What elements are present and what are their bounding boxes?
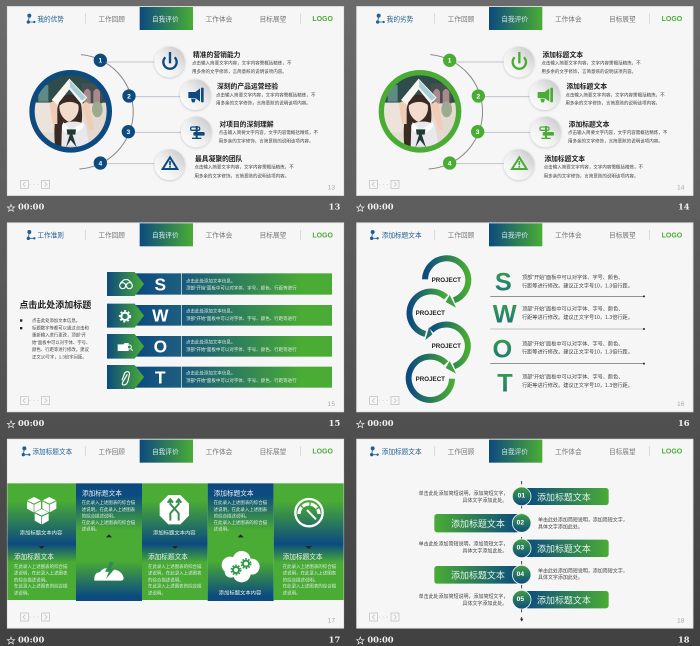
item 2: 点击输入简要文字内容，文字内容需概括精炼，不	[216, 91, 316, 98]
column 4: 添加标题文本内容	[219, 589, 262, 597]
ring 2: PROJECT	[416, 310, 445, 317]
nav arrows, page number and footer: 00:00	[367, 202, 394, 212]
item 3: 3	[126, 129, 130, 136]
banner T: 点击此处添加文本信息。	[186, 370, 235, 377]
item 4: 最具凝聚的团队	[195, 154, 243, 163]
column 1: 在此录入上述图表的综合描	[14, 583, 68, 590]
SWOT letter W: 行距等进行修改。建议正文字号10，1.3倍行距。	[522, 313, 633, 321]
header bar 18	[370, 440, 683, 463]
SWOT letter O: 行距等进行修改。建议正文字号10，1.3倍行距。	[522, 348, 633, 356]
banner W	[107, 304, 332, 328]
slide 15: SWOT banners	[7, 223, 344, 428]
nav arrows, page number and footer: 13	[328, 185, 335, 192]
column 4: 在此录入上述图表的综合描	[214, 519, 268, 526]
item 4	[94, 149, 294, 180]
nav arrows, page number and footer: 16	[677, 401, 685, 408]
SWOT letter T: T	[497, 370, 513, 398]
column 4: 述说明。	[214, 526, 231, 533]
header bar 13: 自我评价	[152, 14, 179, 23]
header bar 13: 目标展望	[260, 14, 287, 23]
item 2: 2	[127, 93, 131, 100]
column 5: 述说明，在此录入上述图表	[283, 569, 337, 576]
column 3: 在此录入上述图表的综合描	[148, 583, 202, 590]
SWOT letter O: 顶部“开始”面板中可以对字体、字号、颜色、	[522, 339, 623, 347]
header bar 14: 目标展望	[609, 14, 636, 23]
SWOT letter S: 顶部“开始”面板中可以对字体、字号、颜色、	[522, 273, 623, 281]
banner S: S	[155, 275, 166, 295]
nav arrows, page number and footer	[7, 180, 340, 212]
header bar 18: 工作回顾	[448, 447, 475, 456]
nav arrows, page number and footer	[7, 397, 340, 428]
step 01: 单击此处添加简短说明，添加简短文字，	[419, 490, 508, 497]
item 2: 用多余的文字修饰，言简意赅的说明该项内容。	[216, 100, 311, 107]
ring 3	[431, 324, 468, 374]
item 2	[122, 79, 316, 110]
header bar 17: 添加标题文本	[32, 447, 73, 456]
left heading and bullets: 点击此处添加标题	[19, 299, 91, 310]
header bar 15: 工作准则	[37, 231, 64, 240]
step 02: 单击此处添加简短说明，添加简短文字，	[538, 516, 628, 523]
nav arrows, page number and footer: 15	[328, 401, 335, 408]
header bar 13: 工作回顾	[98, 14, 125, 23]
item 1: 点击输入简要文字内容，文字内容需概括精炼，不	[192, 60, 292, 67]
step 03: 03	[517, 545, 524, 552]
header bar 15: 目标展望	[260, 231, 287, 240]
header bar 16: LOGO	[662, 232, 683, 239]
header bar 15: LOGO	[312, 232, 333, 239]
header bar 17: 自我评价	[152, 447, 179, 456]
step 01	[419, 487, 609, 506]
header bar 16: 自我评价	[501, 231, 528, 240]
column 2: 的综合描述说明。	[82, 513, 117, 520]
item 4: 4	[448, 160, 452, 167]
ring 4: PROJECT	[416, 376, 445, 383]
column 5: 述说明。	[283, 589, 300, 596]
header bar 14: 工作体会	[555, 14, 582, 23]
column 1: 述说明。	[14, 589, 32, 596]
column 4	[208, 483, 274, 601]
item 4: 用多余的文字修饰，言简意赅的说明该项内容。	[544, 172, 639, 179]
header bar 16: 添加标题文本	[382, 231, 422, 240]
step 03: 单击此处添加简短说明，添加简短文字，	[419, 541, 508, 548]
item 4	[443, 149, 643, 180]
header bar 14: 自我评价	[501, 14, 528, 23]
item 2	[472, 79, 665, 110]
nav arrows, page number and footer	[357, 180, 690, 212]
header bar 18: LOGO	[662, 449, 683, 456]
item 2: 点击输入简要文字内容，文字内容需概括精炼，不	[565, 91, 665, 98]
left heading and bullets: 点击此处添加文本信息。	[32, 317, 80, 324]
header bar 16: 工作回顾	[448, 231, 475, 240]
SWOT letter T: 顶部“开始”面板中可以对字体、字号、颜色、	[522, 372, 623, 380]
header bar 17	[22, 440, 333, 463]
item 1: 精准的营销能力	[193, 50, 241, 59]
left heading and bullets	[19, 299, 91, 360]
column 1: 添加标题文本	[14, 552, 54, 561]
column 3: 在此录入上述图表的综合描	[148, 563, 202, 570]
item 1: 1	[448, 58, 452, 65]
item 3: 点击输入简要文字内容，文字内容需概括精炼，不	[568, 129, 668, 136]
column 1: 的综合描述说明。	[14, 576, 50, 583]
item 1	[443, 47, 641, 77]
nav arrows, page number and footer: 00:00	[367, 634, 394, 644]
column 3: 述说明。	[148, 589, 166, 596]
header bar 17: LOGO	[312, 449, 333, 456]
ring 4	[409, 357, 452, 400]
step 01: 添加标题文本	[537, 491, 591, 502]
header bar 15	[27, 223, 333, 246]
step 04: 04	[517, 571, 524, 578]
step 03: 添加标题文本	[537, 543, 591, 554]
nav arrows, page number and footer: 14	[677, 185, 685, 192]
nav arrows, page number and footer: 15	[329, 418, 340, 428]
banner T: T	[155, 368, 166, 388]
banner T: 顶部“开始”面板中可以对字体、字号、颜色、行距等进行	[186, 377, 297, 384]
column 3: 述说明，在此录入上述图表	[148, 569, 202, 576]
item 2: 2	[476, 93, 480, 100]
header bar 14: LOGO	[662, 16, 683, 23]
left heading and bullets: 正文10号字，1.3倍字间距。	[32, 353, 87, 360]
header bar 18: 工作体会	[555, 447, 582, 456]
header bar 18: 添加标题文本	[382, 447, 422, 456]
slide 17: five gradient columns	[7, 439, 344, 644]
column 2	[76, 483, 142, 601]
item 3	[122, 117, 318, 147]
column 3: 的综合描述说明。	[148, 576, 184, 583]
header bar 13: 工作体会	[206, 14, 233, 23]
column 2: 述说明。	[82, 526, 99, 533]
portrait photo in blue ring	[32, 73, 109, 150]
column 1: 述说明，在此录入上述图表	[14, 569, 68, 576]
header bar 18: 自我评价	[501, 447, 528, 456]
banner O: 顶部“开始”面板中可以对字体、字号、颜色、行距等进行	[186, 346, 297, 353]
column 2: 述说明，在此录入上述图表	[82, 506, 136, 513]
nav arrows, page number and footer: 00:00	[367, 418, 394, 428]
header bar 15: 工作体会	[206, 231, 233, 240]
step 04: 单击此处添加简短说明，添加简短文字，	[538, 567, 628, 574]
nav arrows, page number and footer: 17	[328, 617, 335, 624]
nav arrows, page number and footer: 00:00	[18, 634, 44, 644]
item 4: 点击输入简要文字内容，文字内容需概括精炼，不	[544, 164, 643, 171]
item 3: 3	[476, 129, 480, 136]
banner S: 点击此处添加文本信息。	[186, 277, 235, 284]
column 3: 添加标题文本内容	[153, 528, 196, 536]
curved arc connector	[429, 55, 483, 169]
item 1: 用多余的文字修饰，言简意赅的说明该项内容。	[541, 68, 636, 75]
header bar 15: 工作回顾	[98, 231, 125, 240]
header bar 14	[376, 7, 683, 30]
column 4: 在此录入上述图表的综合描	[214, 499, 268, 506]
ring 1: PROJECT	[432, 277, 461, 284]
step 05: 添加标题文本	[537, 594, 591, 605]
step 05	[419, 590, 609, 609]
item 4: 添加标题文本	[544, 154, 585, 163]
step 02	[434, 514, 628, 532]
left heading and bullets: 标题数字等都可以通过点击和	[32, 325, 89, 332]
step 01: 具体文字添加此处。	[462, 497, 507, 504]
banner S: 顶部“开始”面板中可以对字体、字号、颜色、行距等进行	[186, 285, 297, 292]
SWOT letter T	[497, 370, 633, 398]
item 3: 点击输入简要文字内容，文字内容需概括精炼，不	[219, 129, 318, 136]
step 04: 具体文字添加此处。	[538, 574, 583, 581]
item 2: 添加标题文本	[566, 82, 607, 91]
item 1: 1	[98, 58, 102, 65]
column 5: 的综合描述说明。	[283, 576, 318, 583]
step 05: 05	[517, 596, 524, 603]
step 05: 具体文字添加此处。	[462, 600, 507, 607]
item 1: 用多余的文字修饰，言简意赅的说明该项内容。	[192, 68, 287, 75]
header bar 14: 我的劣势	[387, 14, 414, 23]
header bar 17: 目标展望	[260, 447, 287, 456]
timeline axis	[520, 481, 523, 622]
slide 13: my strengths	[7, 6, 344, 212]
nav arrows, page number and footer: 16	[678, 418, 690, 428]
nav arrows, page number and footer	[7, 613, 340, 644]
banner T	[107, 365, 332, 389]
banner W: W	[152, 306, 169, 326]
banner W: 点击此处添加文本信息。	[186, 308, 235, 315]
nav arrows, page number and footer: 14	[678, 202, 690, 212]
header bar 13: 我的优势	[37, 14, 64, 23]
nav arrows, page number and footer: 00:00	[18, 418, 44, 428]
item 2: 用多余的文字修饰，言简意赅的说明该项内容。	[565, 100, 660, 107]
step 03	[419, 539, 609, 558]
SWOT letter S: 行距等进行修改。建议正文字号10，1.3倍行距。	[522, 281, 633, 289]
column 4: 的综合描述说明。	[214, 513, 249, 520]
nav arrows, page number and footer: 17	[329, 634, 340, 644]
header bar 13	[27, 7, 333, 30]
header bar 13: LOGO	[312, 16, 333, 23]
banner W: 顶部“开始”面板中可以对字体、字号、颜色、行距等进行	[186, 315, 297, 322]
item 4: 用多余的文字修饰，言简意赅的说明该项内容。	[194, 172, 289, 179]
ring 1	[425, 258, 468, 308]
nav arrows, page number and footer	[357, 613, 690, 644]
nav arrows, page number and footer: 18	[677, 617, 685, 624]
column 2: 在此录入上述图表的综合描	[82, 519, 136, 526]
curved arc connector	[79, 55, 133, 169]
slide 14: my weaknesses	[357, 6, 693, 212]
SWOT letter W: 顶部“开始”面板中可以对字体、字号、颜色、	[522, 305, 623, 313]
step 04	[434, 565, 628, 584]
SWOT letter W: W	[493, 300, 517, 328]
ring 2	[410, 291, 446, 340]
left heading and bullets: 重新输入进行更改，顶部“开	[32, 332, 87, 339]
item 1: 点击输入简要文字内容，文字内容需概括精炼，不	[541, 60, 641, 67]
SWOT letter T: 行距等进行修改。建议正文字号10，1.3倍行距。	[522, 381, 633, 389]
item 4: 点击输入简要文字内容，文字内容需概括精炼，不	[194, 164, 294, 171]
step 04: 添加标题文本	[451, 569, 505, 580]
banner O: 点击此处添加文本信息。	[186, 339, 235, 346]
column 5	[274, 483, 344, 600]
SWOT letter W	[490, 300, 645, 330]
column 2: 在此录入上述图表的综合描	[82, 499, 136, 506]
header bar 17: 工作回顾	[98, 447, 125, 456]
nav arrows, page number and footer	[357, 397, 690, 428]
column 1: 在此录入上述图表的综合描	[14, 563, 68, 570]
column 5: 在此录入上述图表的综合描	[283, 563, 337, 570]
banner O: O	[154, 337, 167, 357]
column 1	[7, 483, 76, 600]
column 3	[142, 483, 208, 600]
header bar 16	[370, 223, 683, 246]
slide 16: project rings and SWOT text	[357, 223, 693, 428]
item 3: 用多余的文字修饰，言简意赅的说明该项内容。	[219, 137, 314, 144]
item 1: 添加标题文本	[542, 50, 583, 59]
header bar 17: 工作体会	[206, 447, 233, 456]
SWOT letter O	[490, 335, 645, 365]
item 1	[94, 47, 292, 77]
banner S	[107, 272, 332, 296]
column 2: 添加标题文本	[82, 488, 122, 497]
ring 3: PROJECT	[432, 343, 461, 350]
item 3: 添加标题文本	[569, 119, 610, 128]
nav arrows, page number and footer: 00:00	[18, 202, 44, 212]
step 03: 具体文字添加此处。	[462, 548, 507, 555]
column 1: 添加标题文本内容	[20, 528, 63, 536]
nav arrows, page number and footer: 13	[329, 202, 340, 212]
header bar 16: 目标展望	[609, 231, 636, 240]
header bar 16: 工作体会	[555, 231, 582, 240]
header bar 14: 工作回顾	[448, 14, 475, 23]
item 4: 4	[98, 160, 102, 167]
left heading and bullets: 始”面板中可以对字体、字号、	[32, 339, 90, 346]
item 3	[471, 117, 668, 147]
column 5: 添加标题文本	[283, 552, 323, 561]
step 05: 单击此处添加简短说明，添加简短文字，	[419, 593, 508, 600]
nav arrows, page number and footer: 18	[678, 634, 690, 644]
SWOT letter S: S	[495, 268, 512, 296]
portrait photo in green ring	[381, 73, 459, 150]
item 2: 深刻的产品运营经验	[217, 82, 278, 91]
column 3: 添加标题文本	[148, 552, 188, 561]
column 5: 在此录入上述图表的综合描	[283, 583, 337, 590]
column 4: 述说明，在此录入上述图表	[214, 506, 268, 513]
item 3: 对项目的深刻理解	[219, 119, 274, 128]
step 02: 02	[517, 519, 524, 526]
slide 18: vertical timeline	[357, 439, 693, 644]
step 02: 添加标题文本	[451, 518, 505, 529]
step 01: 01	[518, 493, 525, 500]
header bar 15: 自我评价	[152, 231, 179, 240]
SWOT letter O: O	[492, 335, 512, 363]
banner O	[107, 334, 332, 359]
SWOT letter S	[490, 268, 645, 297]
header bar 18: 目标展望	[609, 447, 636, 456]
column 4: 添加标题文本	[214, 488, 254, 497]
item 3: 用多余的文字修饰，言简意赅的说明该项内容。	[568, 137, 663, 144]
left heading and bullets: 颜色、行距等进行修改。建议	[32, 346, 89, 353]
step 02: 具体文字添加此处。	[538, 523, 583, 530]
